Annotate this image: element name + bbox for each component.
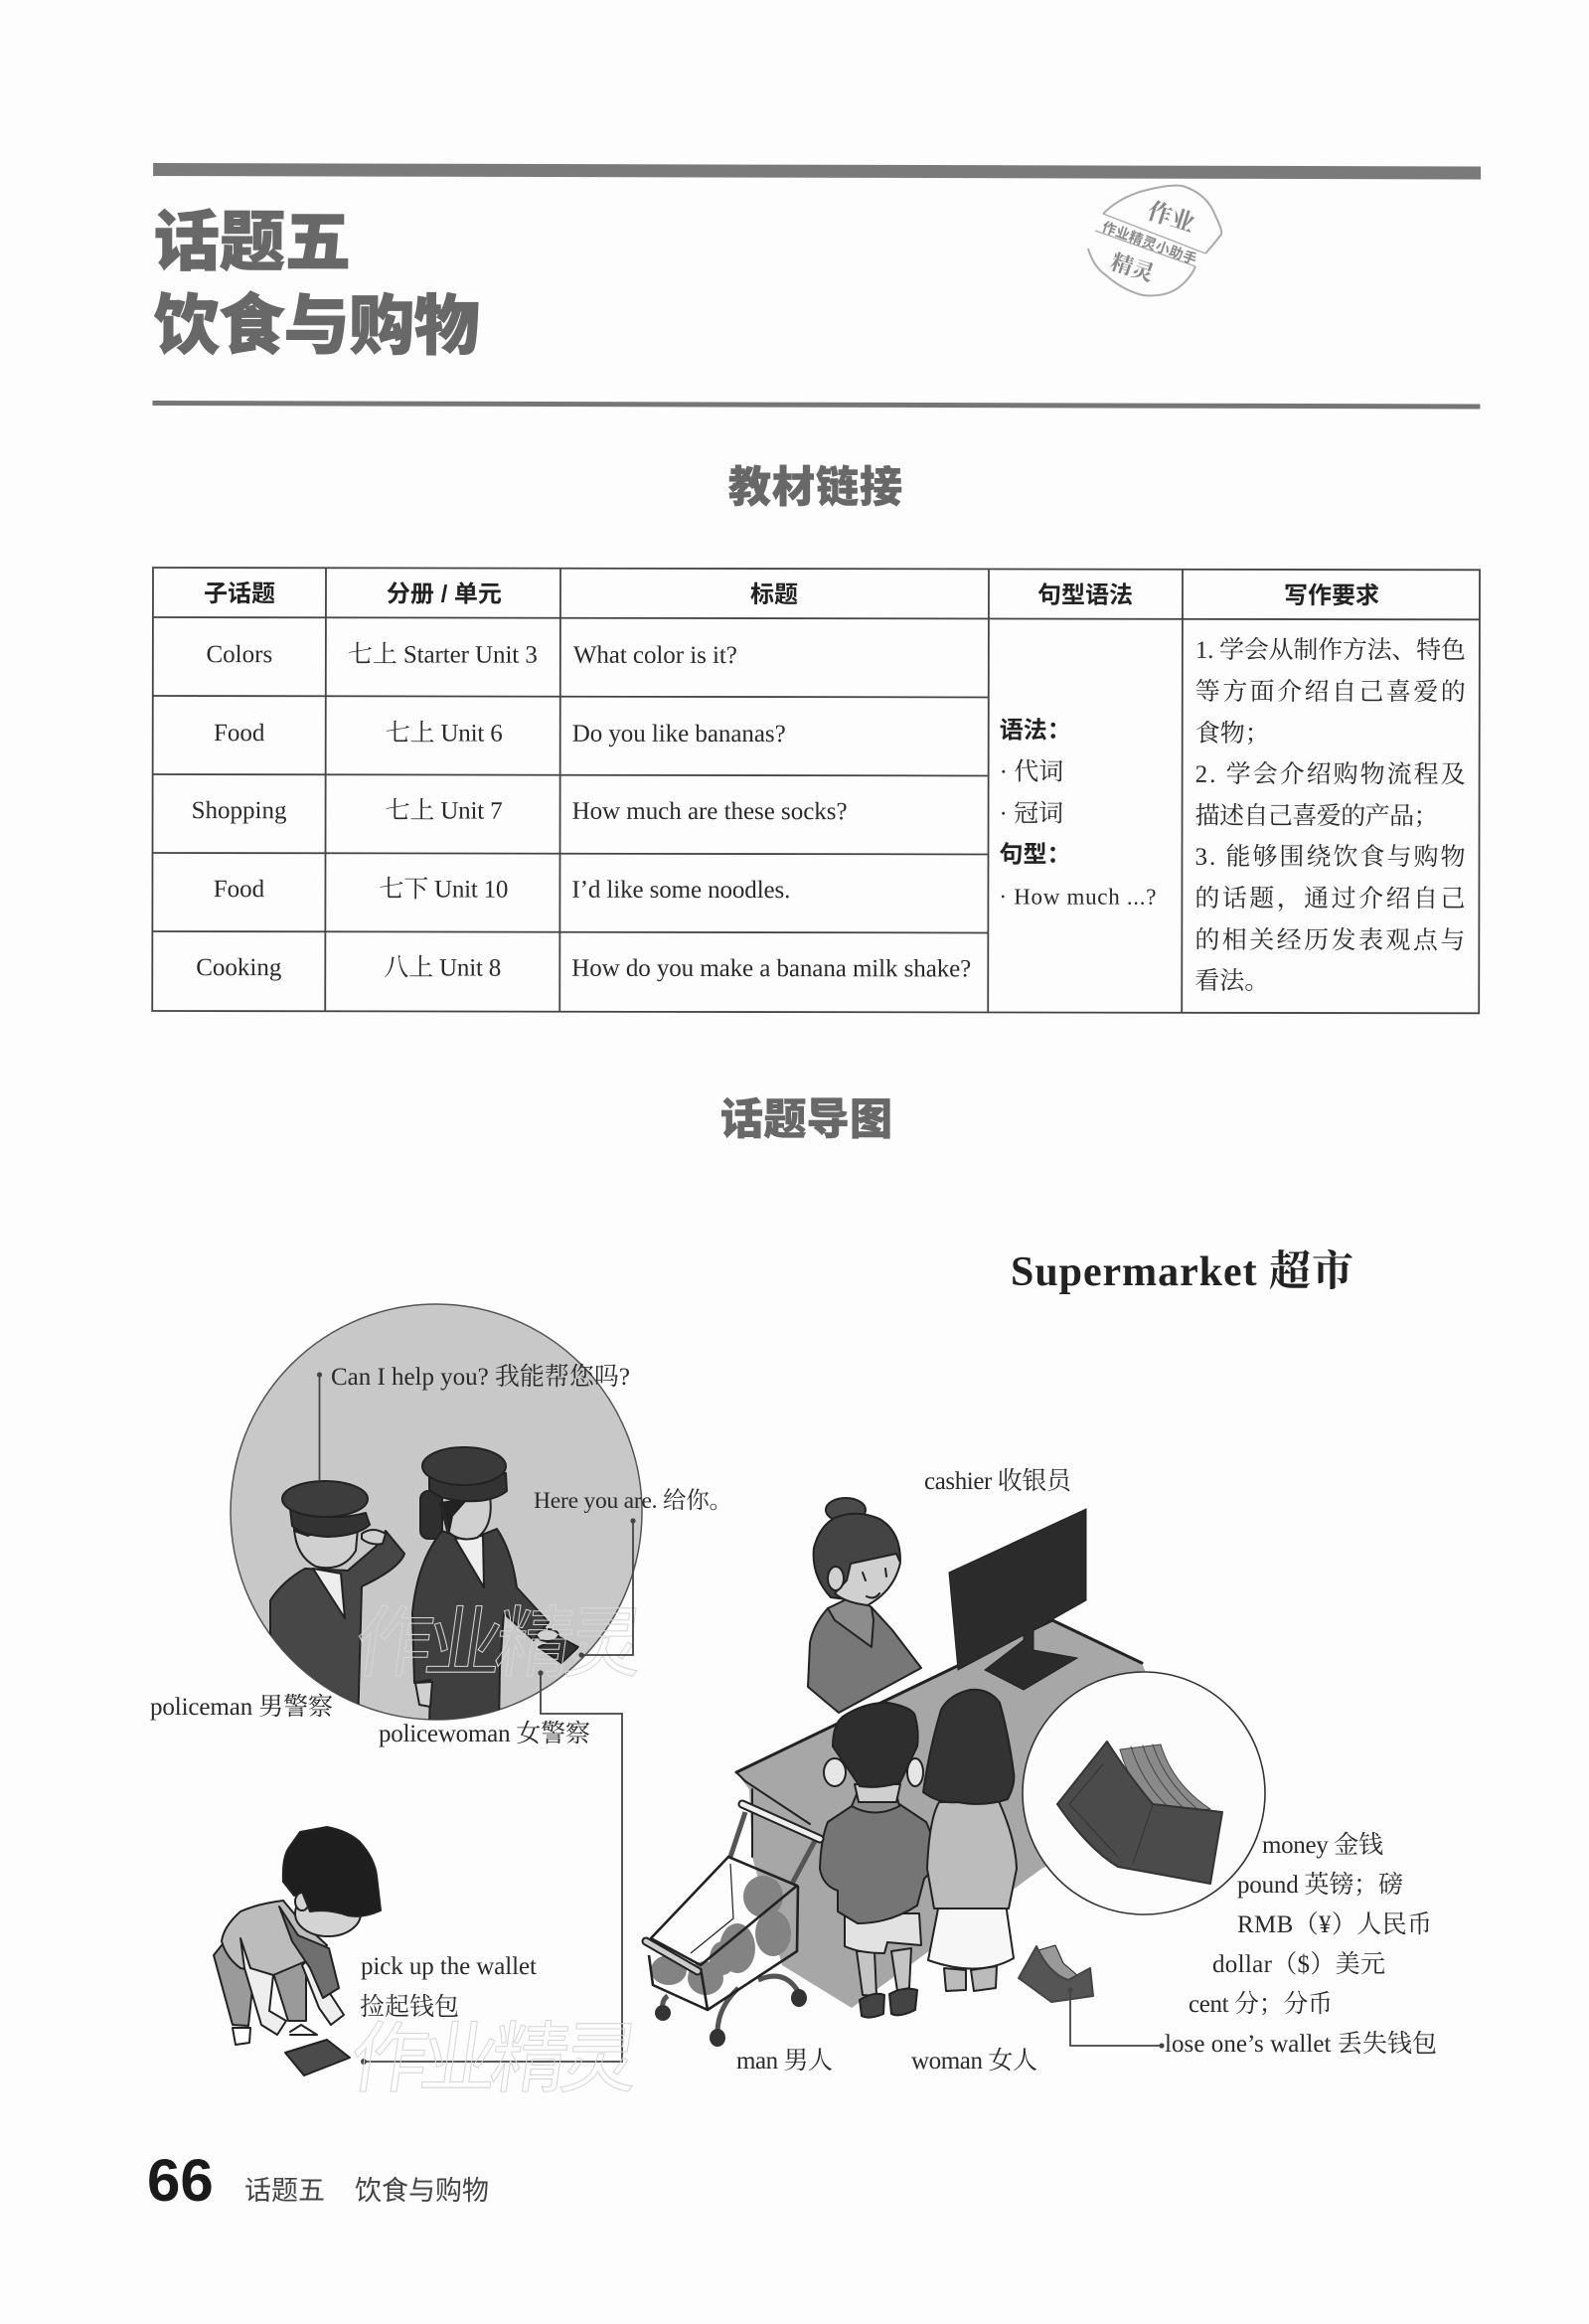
footer title: 饮食与购物	[355, 2176, 489, 2206]
illustration: man from behind	[820, 1703, 937, 2018]
icon: policeman	[270, 1481, 404, 1730]
vocabulary list: pound 英镑；磅	[1237, 1871, 1403, 1899]
title: line two: 饮食与购物	[154, 288, 480, 363]
illustration: police circle	[231, 1304, 642, 1730]
label: pick up the wallet: pick up the wallet	[361, 1953, 537, 1980]
column: sub-topics	[191, 641, 287, 981]
column: sub-topics: Colors	[206, 641, 272, 668]
top bar	[153, 163, 1481, 179]
vocabulary list: dollar（$）美元	[1212, 1950, 1385, 1978]
column: writing requirements: 的话题，通过介绍自己	[1194, 885, 1465, 913]
vocabulary list	[1189, 1831, 1432, 2018]
stamp: 作业	[1144, 191, 1200, 239]
footer title: 话题五	[244, 2176, 325, 2206]
vocabulary list: cent 分；分币	[1189, 1990, 1333, 2018]
table header row: 句型语法	[1037, 582, 1133, 609]
column: grammar and patterns: 语法：	[1000, 717, 1071, 745]
column: titles: I’d like some noodles.	[571, 877, 790, 904]
cart food	[651, 1876, 791, 1995]
column: writing requirements: 的相关经历发表观点与	[1194, 926, 1465, 954]
column: writing requirements: 3. 能够围绕饮食与购物	[1194, 843, 1466, 871]
column: grammar and patterns: · 代词	[1000, 757, 1063, 786]
illustration: monitor	[949, 1509, 1086, 1690]
column: volume and unit: 七上 Starter Unit 3	[348, 640, 538, 669]
connector: policewoman wallet to boy	[361, 1670, 622, 2065]
stamp: 作业精灵小助手	[1099, 217, 1199, 269]
column: grammar and patterns	[999, 717, 1157, 910]
column: titles: How much are these socks?	[572, 798, 848, 825]
column: sub-topics: Cooking	[196, 954, 282, 981]
connector: here you are	[578, 1518, 636, 1658]
column: volume and unit: 八上 Unit 8	[384, 953, 501, 982]
cart handle	[646, 1941, 698, 1971]
watermark: lower: 作业精灵	[345, 2015, 645, 2102]
icon: wallet in hand	[537, 1629, 578, 1663]
illustration: shopping cart	[646, 1804, 820, 2047]
icon: open wallet with banknotes	[1057, 1742, 1222, 1884]
vocabulary list: money 金钱	[1262, 1831, 1383, 1859]
illustration: boy picking up wallet	[214, 1827, 381, 2075]
heading: 话题导图: 话题导图	[720, 1096, 892, 1144]
column: writing requirements: 食物；	[1195, 720, 1270, 747]
header section	[152, 163, 1481, 409]
page number: 66	[147, 2147, 214, 2214]
table grid	[152, 568, 1480, 1013]
column: writing requirements: 等方面介绍自己喜爱的	[1195, 678, 1466, 706]
illustration: counter	[736, 1620, 1192, 2008]
column: titles: How do you make a banana milk shake?	[571, 955, 971, 982]
column: titles: Do you like bananas?	[572, 721, 786, 747]
icon: wallet on floor	[1019, 1945, 1093, 2002]
vocabulary list: RMB（¥）人民币	[1237, 1910, 1432, 1938]
heading: Supermarket: Supermarket 超市	[1011, 1248, 1353, 1295]
column: volume and unit: 七下 Unit 10	[379, 875, 508, 904]
label: policeman: policeman 男警察	[150, 1693, 333, 1721]
column: volume and unit: 七上 Unit 6	[386, 719, 503, 747]
stamp: 精灵	[1107, 246, 1159, 288]
column: titles	[571, 642, 972, 982]
cart basket	[649, 1857, 798, 2010]
table: textbook links	[152, 568, 1480, 1013]
cart frame back	[663, 1812, 815, 2033]
column: writing requirements: 看法。	[1194, 967, 1269, 995]
label: policewoman: policewoman 女警察	[379, 1720, 590, 1747]
table header row: 分册 / 单元	[387, 581, 502, 608]
column: writing requirements: 描述自己喜爱的产品；	[1195, 802, 1439, 830]
illustration: cashier	[808, 1498, 921, 1713]
label: lose one's wallet: lose one’s wallet 丢失钱包	[1165, 2030, 1437, 2058]
column: grammar and patterns: · 冠词	[1000, 799, 1063, 828]
table header row: 标题	[750, 581, 798, 608]
dialogue: can I help you: Can I help you? 我能帮您吗?	[331, 1363, 630, 1391]
connector: lose wallet	[1067, 1987, 1165, 2049]
column: writing requirements: 1. 学会从制作方法、特色	[1195, 636, 1466, 664]
title: line one: 话题五	[154, 205, 351, 279]
table header row: 写作要求	[1284, 582, 1379, 609]
label: woman: woman 女人	[911, 2047, 1037, 2075]
table header row: 子话题	[204, 581, 275, 607]
column: writing requirements: 2. 学会介绍购物流程及	[1195, 760, 1466, 788]
label: 捡起钱包: 捡起钱包	[360, 1993, 459, 2021]
column: grammar and patterns: 句型：	[999, 841, 1071, 869]
column: volume and unit: 七上 Unit 7	[386, 796, 503, 825]
column: writing requirements	[1194, 636, 1466, 995]
watermark: upper: 作业精灵	[350, 1599, 650, 1687]
label: man: man 男人	[736, 2048, 833, 2075]
bottom rule	[152, 401, 1480, 409]
column: sub-topics: Food	[214, 876, 265, 903]
cart wheels	[655, 1989, 807, 2047]
stamp	[1088, 186, 1221, 295]
table header row	[204, 581, 1379, 609]
column: titles: What color is it?	[573, 642, 737, 669]
connector: can I help you	[317, 1372, 322, 1481]
column: grammar and patterns: · How much ...?	[999, 884, 1156, 910]
label: cashier: cashier 收银员	[924, 1467, 1073, 1495]
heading: 教材链接: 教材链接	[728, 464, 902, 512]
column: sub-topics: Shopping	[192, 797, 287, 824]
icon: policewoman	[412, 1447, 549, 1730]
dialogue: here you are: Here you are. 给你。	[534, 1487, 732, 1514]
column: volume and unit	[347, 640, 538, 982]
illustration: woman from behind	[923, 1690, 1017, 1991]
column: sub-topics: Food	[214, 720, 265, 747]
illustration: wallet close-up circle	[1023, 1672, 1265, 1914]
